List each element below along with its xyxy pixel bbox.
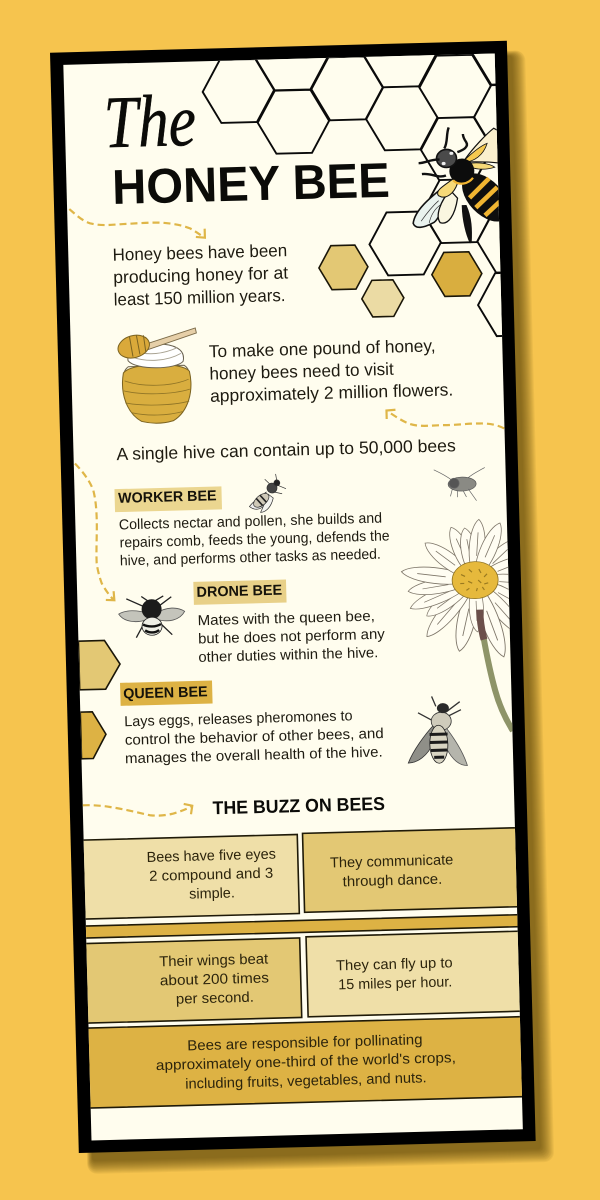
poster: [50, 40, 554, 1174]
text: worker bee description: Collects nectar and pollen, she builds and: [119, 511, 382, 533]
panel: wing beats: per second.: [176, 990, 254, 1008]
text: drone bee description: but he does not perform any: [198, 627, 386, 648]
text: hive size: A single hive can contain up to 50,000 bees: [116, 435, 456, 464]
card background: [63, 54, 523, 1140]
panel: pollination: including fruits, vegetables, and nuts.: [185, 1070, 427, 1093]
label: queen bee: QUEEN BEE: [123, 684, 208, 703]
divider strip: [84, 915, 520, 938]
panel: pollination: approximately one-third of the world's crops,: [156, 1050, 456, 1074]
label: worker bee: [114, 486, 222, 512]
honeycomb top right: [202, 54, 502, 338]
panel: wing beats: about 200 times: [160, 970, 269, 989]
flower petals: [400, 518, 510, 658]
text: flowers fact: approximately 2 million flowers.: [210, 379, 454, 406]
content area: [68, 54, 522, 1109]
text: intro fact: Honey bees have been: [112, 240, 287, 265]
panel: pollination: Bees are responsible for pollinating: [187, 1032, 423, 1054]
card shadow: [58, 50, 554, 1174]
panel: five eyes: 2 compound and 3: [149, 866, 273, 885]
panel: five eyes: simple.: [189, 885, 235, 903]
text: queen bee description: [124, 708, 384, 767]
panel: flight speed: They can fly up to: [336, 955, 453, 974]
title main word: HONEY BEE: [112, 154, 390, 215]
panel: pollination: [87, 1017, 524, 1108]
heading: the buzz on bees: THE BUZZ ON BEES: [212, 793, 385, 818]
text: flowers fact: honey bees need to visit: [209, 359, 394, 384]
label: queen bee: [120, 680, 213, 706]
flower centre: [452, 561, 499, 599]
arrow: dashed to buzz heading: [83, 802, 192, 818]
arrow: dashed to drone bee: [75, 463, 114, 601]
panel: wing beats: Their wings beat: [159, 952, 268, 970]
text: intro fact: least 150 million years.: [114, 285, 286, 310]
panel: wing beats: [84, 938, 302, 1023]
text: intro fact: producing honey for at: [113, 263, 289, 287]
icon: honey bee illustration: [412, 127, 499, 244]
arrow: dashed to intro: [68, 208, 206, 239]
icon: honey jar: [115, 328, 199, 424]
text: intro fact: [114, 244, 288, 306]
text: worker bee description: repairs comb, feeds the young, defends the: [119, 528, 390, 551]
text: queen bee description: control the behavior of other bees, and: [125, 726, 384, 749]
panel: flight speed: [306, 931, 522, 1017]
panel: five eyes: Bees have five eyes: [146, 847, 276, 866]
text: drone bee description: other duties within the hive.: [198, 645, 379, 666]
label: drone bee: [193, 580, 287, 605]
label: worker bee: WORKER BEE: [118, 488, 217, 507]
filled hexagons: [68, 242, 494, 759]
label: drone bee: DRONE BEE: [196, 583, 283, 601]
icon: small bee top right: [434, 467, 486, 502]
icon: queen bee sketch: [407, 696, 467, 767]
panel: dance: [303, 828, 519, 912]
icon: drone bee sketch: [118, 595, 185, 638]
arrow: dashed to flowers fact: [385, 408, 504, 430]
panel: dance: through dance.: [343, 872, 442, 890]
icon: small worker bee: [249, 474, 287, 513]
text: worker bee description: [119, 510, 390, 569]
text: drone bee description: [198, 610, 385, 662]
flower stem: [480, 609, 513, 732]
title: [107, 94, 388, 204]
text: flowers fact: To make one pound of honey,: [209, 335, 436, 361]
panel: flight speed: 15 miles per hour.: [338, 974, 452, 993]
panel: five eyes: [82, 834, 299, 919]
text: drone bee description: Mates with the queen bee,: [197, 609, 375, 629]
panel: dance: They communicate: [330, 852, 453, 872]
title script word: The: [103, 80, 197, 164]
text: queen bee description: Lays eggs, releases pheromones to: [124, 708, 353, 730]
card frame: [50, 41, 536, 1153]
text: queen bee description: manages the overall health of the hive.: [125, 745, 383, 767]
text: flowers fact: [209, 335, 454, 406]
illustration: daisy flower: [400, 518, 512, 732]
text: worker bee description: hive, and performs other tasks as needed.: [120, 547, 381, 569]
